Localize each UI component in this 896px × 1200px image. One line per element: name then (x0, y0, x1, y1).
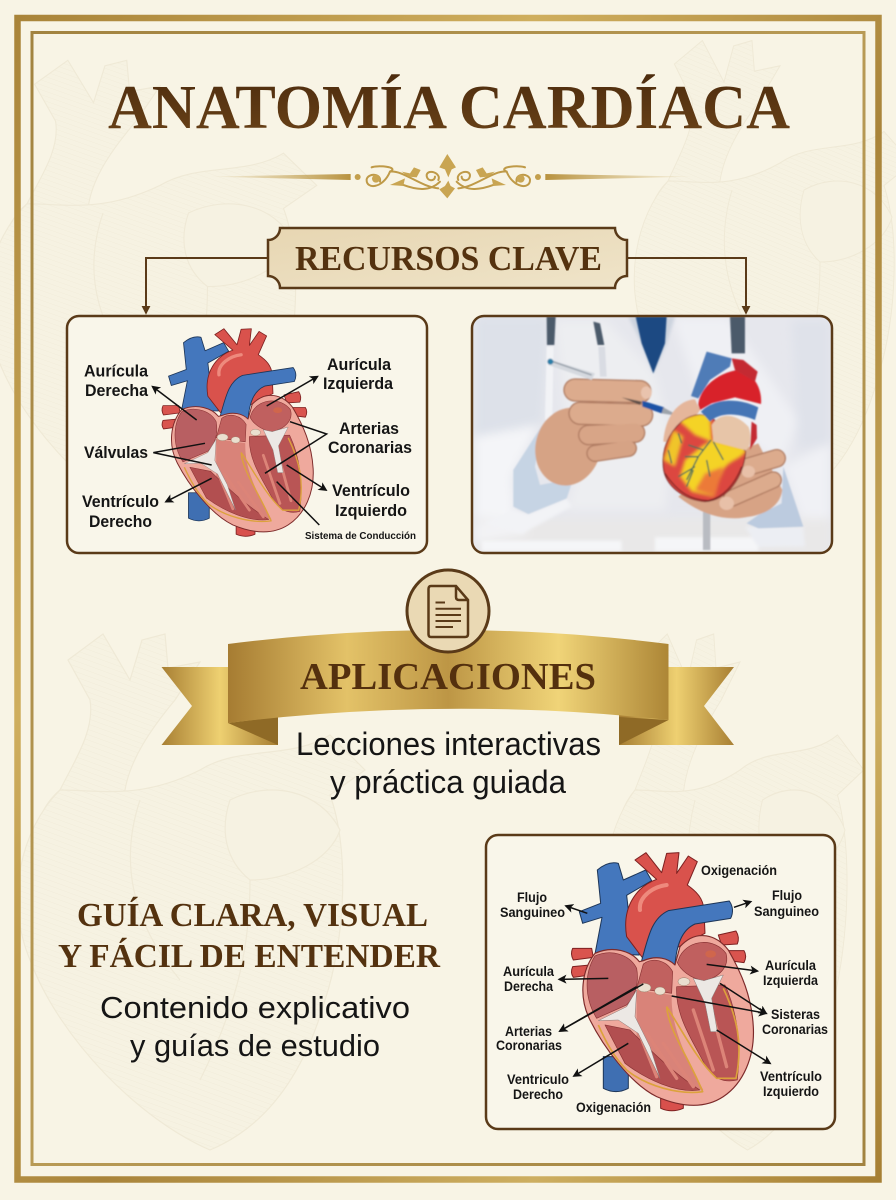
labels: Sisteras (771, 1006, 820, 1022)
labels: Flujo (772, 887, 802, 903)
panel: labelled heart diagram (67, 316, 427, 553)
text: contenido explicativo (100, 990, 410, 1063)
ornamental divider (207, 154, 697, 198)
document icon badge (407, 570, 489, 652)
illustration: heart cross-section (162, 329, 313, 536)
ribbon main band (228, 630, 668, 723)
labels: Oxigenación (701, 862, 777, 878)
heading plaque: recursos clave (268, 228, 627, 288)
text: lecciones interactivas: y práctica guiada (330, 764, 566, 800)
arrows (153, 377, 327, 525)
labels: Ventriculo (507, 1071, 569, 1087)
labels (82, 355, 416, 542)
labels: Sistema de Conducción (305, 530, 416, 542)
labels: Izquierdo (763, 1083, 819, 1099)
title: ANATOMÍA CARDÍACA (108, 74, 790, 142)
labels: Izquierda (763, 972, 818, 988)
labels: Coronarias (762, 1021, 828, 1037)
labels: Coronarias (328, 438, 412, 457)
labels: Derecho (513, 1086, 563, 1102)
labels: Derecho (89, 512, 152, 531)
labels: Ventrículo (760, 1068, 822, 1084)
connector lines from plaque (146, 258, 746, 313)
labels: Sanguineo (754, 903, 819, 919)
heading plaque: recursos clave: RECURSOS CLAVE (295, 239, 602, 278)
illustration: heart cross-section (571, 853, 753, 1111)
ribbon banner: aplicaciones (162, 570, 734, 745)
labels: Coronarias (496, 1037, 562, 1053)
labels: Ventrículo (332, 481, 410, 500)
labels: Izquierda (323, 374, 394, 393)
labels: Oxigenación (576, 1099, 651, 1115)
labels: Aurícula (765, 957, 816, 973)
labels: Flujo (517, 889, 547, 905)
labels: Derecha (85, 381, 148, 400)
labels (496, 862, 828, 1115)
ribbon tails (162, 667, 734, 745)
arrows (559, 902, 770, 1076)
heading: guía clara: Y FÁCIL DE ENTENDER (58, 938, 440, 975)
labels: Arterias (339, 419, 399, 438)
labels: Aurícula (84, 362, 148, 380)
heading: guía clara (58, 897, 440, 975)
labels: Izquierdo (335, 501, 407, 520)
panel: photo of doctor holding heart model (465, 310, 840, 560)
heading: guía clara: GUÍA CLARA, VISUAL (77, 897, 428, 934)
text: contenido explicativo: Contenido explicativo (100, 990, 410, 1025)
labels: Derecha (504, 978, 553, 994)
labels: Válvulas (84, 443, 148, 462)
text: contenido explicativo: y guías de estudio (130, 1028, 380, 1063)
labels: Aurícula (327, 355, 391, 374)
labels: Aurícula (503, 963, 554, 979)
text: lecciones interactivas (296, 726, 601, 800)
panel: detailed heart diagram (486, 835, 835, 1129)
labels: Arterias (505, 1023, 552, 1039)
labels: Sanguineo (500, 904, 565, 920)
labels: Ventrículo (82, 492, 159, 511)
heading: APLICACIONES (300, 656, 596, 698)
text: lecciones interactivas: Lecciones interactivas (296, 726, 601, 762)
